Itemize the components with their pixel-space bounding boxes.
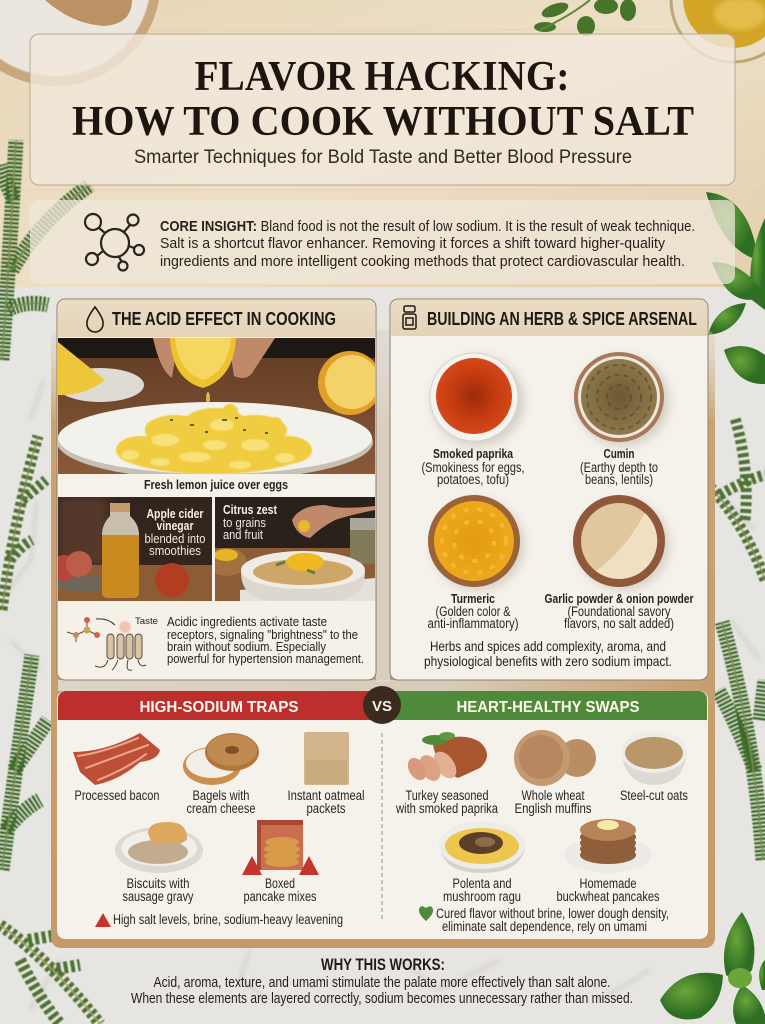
item: cumin: (Earthy depth to	[580, 460, 658, 475]
caption: Fresh lemon juice over eggs	[144, 477, 288, 492]
item: bagel with cream cheese	[183, 733, 259, 816]
text: herb summary: Herbs and spices add complexity, aroma, and	[430, 638, 666, 654]
icon: acid drop	[87, 307, 103, 332]
text: acid explanation	[167, 614, 364, 666]
item: cumin: beans, lentils)	[585, 472, 653, 487]
item: steel-cut oats: Steel-cut oats	[620, 788, 688, 803]
photo: apple cider vinegar: Apple cider	[146, 506, 204, 521]
item: processed bacon	[73, 733, 160, 803]
photo: citrus zest	[207, 497, 376, 601]
header: high-sodium traps: HIGH-SODIUM TRAPS	[140, 699, 299, 716]
icon: spice jar	[403, 306, 416, 329]
decoration: rosemary right	[718, 622, 765, 860]
label: taste: Taste	[135, 616, 158, 627]
item: instant oatmeal packet	[288, 732, 364, 816]
core insight text: ingredients and more intelligent cooking methods that protect cardiovascular health.	[160, 253, 685, 270]
photo: apple cider vinegar: blended into	[144, 531, 206, 546]
item: bagel with cream cheese: Bagels with	[192, 788, 250, 803]
heading: BUILDING AN HERB & SPICE ARSENAL	[427, 309, 697, 329]
item: bagel with cream cheese: cream cheese	[186, 801, 256, 816]
item: polenta and mushroom ragu: mushroom ragu	[443, 889, 521, 904]
item: biscuits with sausage gravy: sausage gravy	[122, 889, 194, 904]
item: turmeric: (Golden color &	[436, 604, 510, 619]
core insight text: Salt is a shortcut flavor enhancer. Removing it forces a shift toward higher-quality	[160, 235, 665, 252]
photo: apple cider vinegar: smoothies	[149, 543, 201, 558]
core insight text: CORE INSIGHT: Bland food is not the result of low sodium. It is the result of weak technique.	[160, 218, 695, 235]
photo: lemon over eggs	[56, 338, 382, 480]
item: boxed pancake mix: Boxed	[265, 876, 295, 891]
footer: why this works	[131, 956, 633, 1007]
item: garlic and onion powder: flavors, no salt added)	[564, 616, 674, 631]
badge: vs	[363, 686, 401, 724]
note: heart-healthy benefit: eliminate salt dependence, rely on umami	[442, 919, 647, 934]
heading: THE ACID EFFECT IN COOKING	[112, 309, 336, 329]
core insight text	[160, 218, 695, 270]
icon: warning right	[299, 856, 319, 875]
panel: acid effect	[51, 299, 382, 680]
item: garlic and onion powder	[544, 495, 694, 631]
decoration: basil top right	[706, 192, 765, 384]
decoration: rosemary lower left	[2, 655, 48, 870]
title line 1: FLAVOR HACKING:	[194, 54, 570, 100]
item: cumin: Cumin	[604, 446, 635, 461]
item: steel-cut oats	[620, 731, 688, 803]
decoration: thyme left	[2, 436, 46, 610]
item: whole wheat english muffins: English muffins	[514, 801, 592, 816]
item: turmeric: anti-inflammatory)	[428, 616, 518, 631]
item: turmeric	[428, 495, 524, 631]
icon: warning left	[242, 856, 262, 875]
core insight panel	[30, 200, 735, 284]
decoration: thyme right	[692, 418, 765, 580]
item: smoked paprika: Smoked paprika	[433, 446, 514, 461]
item: polenta and mushroom ragu: Polenta and	[452, 876, 512, 891]
item: cumin	[574, 352, 669, 487]
item: processed bacon: Processed bacon	[74, 788, 160, 803]
item: smoked paprika	[422, 353, 524, 487]
diagram: taste receptor	[67, 616, 158, 670]
item: garlic and onion powder: Garlic powder & onion powder	[544, 591, 694, 606]
photo: citrus zest: Citrus zest	[223, 502, 278, 517]
panel: herb and spice arsenal	[390, 299, 708, 680]
decoration: salt bowl and pestle	[0, 0, 161, 86]
note: heart-healthy benefit	[419, 906, 669, 934]
item: buckwheat pancakes	[556, 819, 660, 904]
subtitle: Smarter Techniques for Bold Taste and Better Blood Pressure	[134, 147, 632, 168]
decoration: basil bottom right	[660, 912, 765, 1024]
note: heart-healthy benefit: Cured flavor without brine, lower dough density,	[436, 906, 669, 921]
photo: citrus zest: and fruit	[223, 527, 263, 542]
panel header	[58, 300, 375, 337]
item: turkey with smoked paprika: with smoked paprika	[395, 801, 498, 816]
item: boxed pancake mix	[242, 820, 319, 904]
item: smoked paprika: potatoes, tofu)	[437, 472, 509, 487]
item: boxed pancake mix: pancake mixes	[244, 889, 317, 904]
header: high-sodium traps	[58, 691, 382, 720]
icon: molecule network	[85, 214, 144, 270]
photo: citrus zest: to grains	[223, 515, 266, 530]
decoration: thyme bottom left	[0, 925, 100, 1024]
item: turkey with smoked paprika: Turkey seasoned	[406, 788, 488, 803]
photo: apple cider vinegar: vinegar	[156, 518, 194, 533]
footer: why this works: WHY THIS WORKS:	[321, 956, 445, 974]
item: turmeric: Turmeric	[451, 591, 495, 606]
item: polenta and mushroom ragu	[439, 821, 525, 904]
wooden board	[51, 330, 715, 948]
decoration: olive oil glass	[671, 0, 765, 62]
item: whole wheat english muffins	[514, 730, 596, 816]
footer: why this works: Acid, aroma, texture, and umami stimulate the palate more effectively than salt alone.	[154, 975, 610, 991]
item: whole wheat english muffins: Whole wheat	[522, 788, 585, 803]
item: instant oatmeal packet: packets	[306, 801, 346, 816]
footer: why this works: When these elements are layered correctly, sodium becomes unnecessary rather than missed.	[131, 991, 633, 1007]
text: acid explanation: Acidic ingredients activate taste	[167, 614, 327, 629]
title line 2: HOW TO COOK WITHOUT SALT	[72, 99, 694, 145]
text: acid explanation: receptors, signaling "brightness" to the	[167, 627, 358, 642]
header: heart-healthy swaps: HEART-HEALTHY SWAPS	[456, 699, 640, 716]
badge: vs: VS	[372, 698, 392, 715]
photo: apple cider vinegar	[51, 497, 212, 601]
item: biscuits with sausage gravy	[115, 822, 203, 904]
note: high salt warning: High salt levels, brine, sodium-heavy leavening	[113, 912, 343, 927]
text: herb summary	[424, 638, 672, 669]
title panel	[30, 34, 735, 185]
item: biscuits with sausage gravy: Biscuits with	[126, 876, 190, 891]
item: turkey with smoked paprika	[395, 732, 498, 816]
caption	[58, 474, 375, 497]
item: smoked paprika: (Smokiness for eggs,	[422, 460, 524, 475]
item: instant oatmeal packet: Instant oatmeal	[288, 788, 364, 803]
item: garlic and onion powder: (Foundational savory	[568, 604, 671, 619]
panel: comparison	[57, 686, 708, 939]
panel header	[391, 300, 707, 336]
text: acid explanation: brain without sodium. Especially	[167, 639, 326, 654]
decoration: parsley top	[534, 0, 636, 36]
text: herb summary: physiological benefits with zero sodium impact.	[424, 653, 672, 669]
item: buckwheat pancakes: Homemade	[580, 876, 636, 891]
item: buckwheat pancakes: buckwheat pancakes	[556, 889, 660, 904]
decoration: rosemary top left	[0, 140, 90, 360]
text: acid explanation: powerful for hypertension management.	[167, 651, 364, 666]
header: heart-healthy swaps	[382, 691, 707, 720]
